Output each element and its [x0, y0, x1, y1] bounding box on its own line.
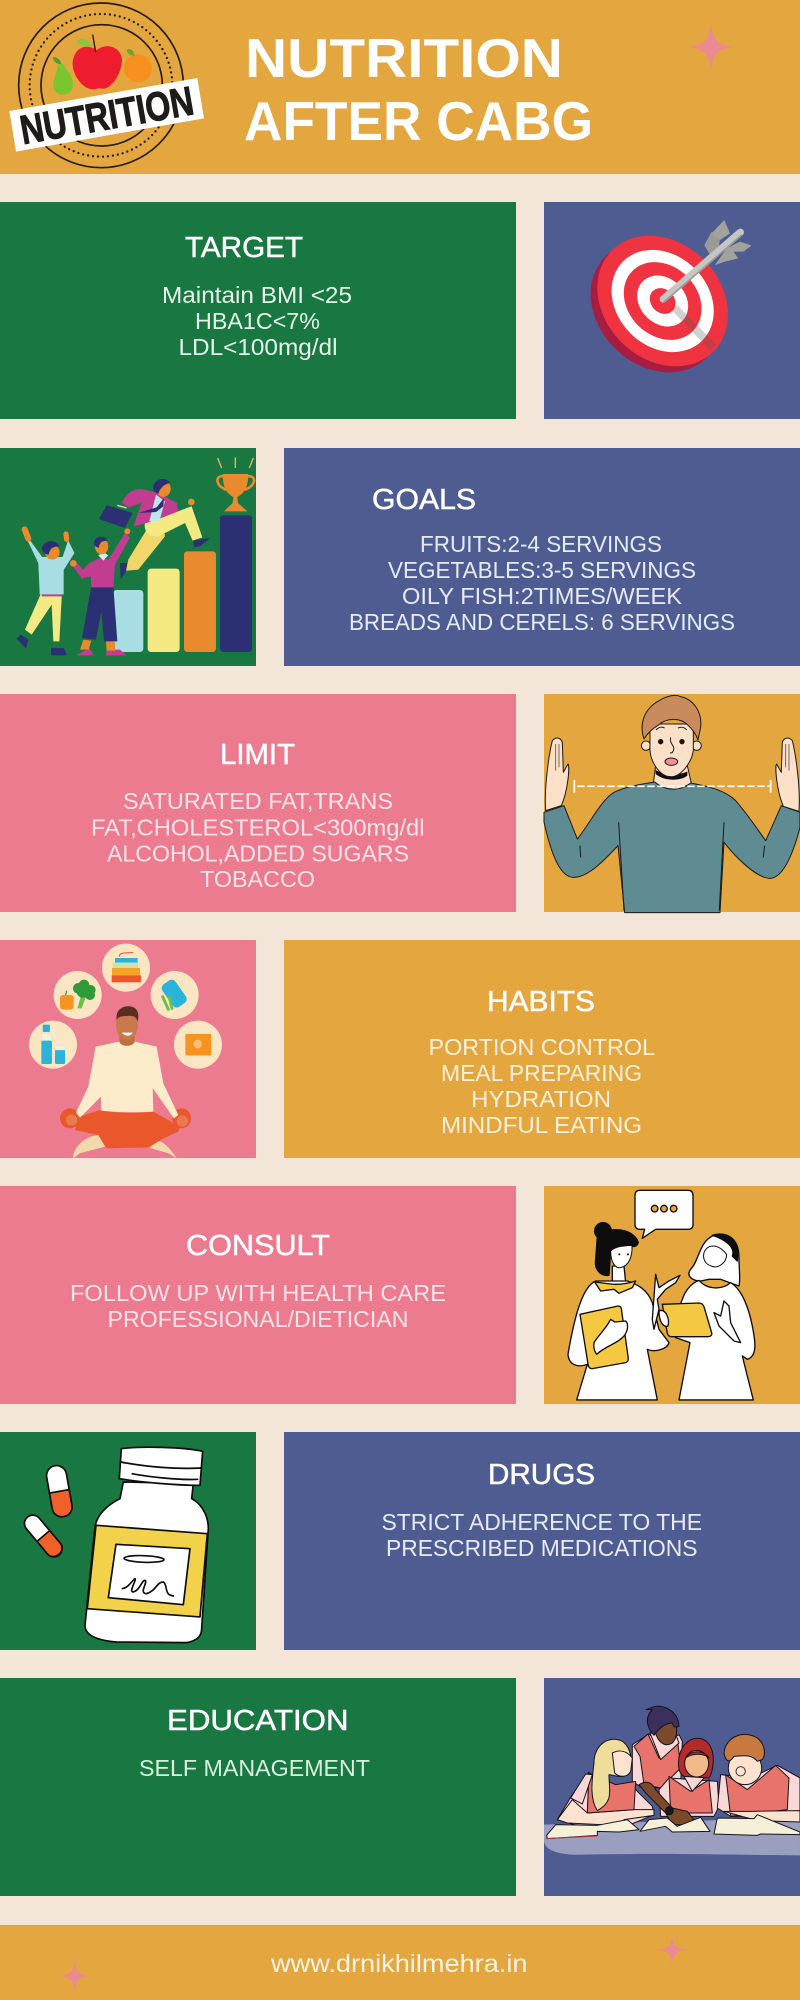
woman left: [595, 1223, 611, 1239]
blonde student: [557, 1739, 654, 1831]
capsule 1: [45, 1464, 74, 1518]
heading: limit: LIMIT: [220, 739, 295, 771]
icon: yoga mat and dumbbells: [160, 978, 189, 1009]
consult text: FOLLOW UP WITH HEALTH CARE: [70, 1280, 446, 1306]
panel: habits illustration: [0, 940, 256, 1158]
panel: goals: [284, 448, 800, 666]
habit items: PORTION CONTROL: [428, 1034, 655, 1060]
person jumping: [99, 479, 210, 580]
panel: target illustration: [544, 202, 800, 419]
books: [547, 1815, 800, 1839]
panel: limit: [0, 694, 516, 912]
icon: water bottle and glass: [41, 1025, 65, 1064]
heading: goals: GOALS: [372, 484, 476, 516]
limit items: ALCOHOL,ADDED SUGARS: [107, 840, 409, 866]
illustration: medicine bottle and capsules: [21, 1447, 208, 1643]
illustration: people climbing bars to a trophy: [17, 457, 254, 655]
target values: HBA1C<7%: [195, 308, 320, 334]
woman right: [689, 1234, 740, 1286]
pointing arm: [639, 1782, 699, 1826]
limit items: SATURATED FAT,TRANS: [123, 788, 393, 814]
illustration: students reading together: [544, 1706, 800, 1855]
serving goals: FRUITS:2-4 SERVINGS: [420, 531, 662, 557]
illustration: meditating man with habit icons: [29, 944, 222, 1158]
logo: nutrition badge: [9, 3, 204, 168]
serving goals: [349, 531, 735, 635]
target values: [162, 282, 352, 360]
serving goals: OILY FISH:2TIMES/WEEK: [402, 583, 683, 609]
illustration: two women talking: [568, 1190, 755, 1400]
table: [544, 1818, 800, 1855]
education text: SELF MANAGEMENT: [139, 1755, 370, 1781]
panel: consult illustration: [544, 1186, 800, 1404]
serving goals: VEGETABLES:3-5 SERVINGS: [388, 557, 696, 583]
panel: drugs: [284, 1432, 800, 1650]
target values: LDL<100mg/dl: [178, 334, 338, 360]
heading: target: TARGET: [185, 232, 303, 264]
panel: drugs illustration: [0, 1432, 256, 1650]
panel: target: [0, 202, 516, 419]
bottle: [85, 1447, 208, 1643]
sparkle left: [60, 1961, 90, 1991]
icon: pepper and broccoli: [60, 980, 96, 1010]
tall student: [632, 1706, 682, 1788]
heading: consult: CONSULT: [186, 1230, 330, 1262]
drugs text: [382, 1509, 702, 1561]
heading: drugs: DRUGS: [488, 1459, 595, 1491]
habit items: [428, 1034, 655, 1138]
website link: www.drnikhilmehra.in: [270, 1950, 528, 1978]
limit items: FAT,CHOLESTEROL<300mg/dl: [91, 814, 425, 840]
habit items: MEAL PREPARING: [441, 1060, 642, 1086]
panel: limit illustration: [544, 694, 800, 913]
drugs text: PRESCRIBED MEDICATIONS: [386, 1535, 698, 1561]
footer banner: [0, 1925, 800, 2000]
panel: education: [0, 1678, 516, 1896]
panel: education illustration: [544, 1678, 800, 1896]
heading: education: EDUCATION: [167, 1705, 348, 1737]
icon: stack of books: [112, 953, 141, 982]
capsule 2: [21, 1512, 66, 1560]
icon: archery target with arrow: [564, 209, 755, 399]
student with glasses: [717, 1734, 800, 1822]
person middle: [70, 528, 130, 655]
sparkle: [688, 23, 734, 71]
logo: nutrition badge: NUTRITION: [17, 77, 197, 153]
trophy: [217, 457, 254, 511]
person left: [17, 529, 73, 655]
header banner: [0, 0, 800, 174]
icon: cushion: [185, 1034, 211, 1055]
limit items: TOBACCO: [200, 866, 315, 892]
title: AFTER CABG: [244, 90, 593, 152]
habit items: HYDRATION: [471, 1086, 611, 1112]
drugs text: STRICT ADHERENCE TO THE: [382, 1509, 702, 1535]
serving goals: BREADS AND CERELS: 6 SERVINGS: [349, 609, 735, 635]
limit items: [91, 788, 425, 892]
panel: consult: [0, 1186, 516, 1404]
red-haired student: [659, 1738, 719, 1816]
seated man: [60, 1006, 191, 1158]
heading: habits: HABITS: [487, 986, 595, 1018]
speech bubble: [635, 1190, 693, 1238]
title: [244, 27, 593, 152]
consult text: [70, 1280, 446, 1332]
panel: goals illustration: [0, 448, 256, 666]
illustration: man measuring with raised hands: [544, 695, 800, 913]
title: NUTRITION: [245, 27, 563, 89]
target values: Maintain BMI <25: [162, 282, 352, 308]
consult text: PROFESSIONAL/DIETICIAN: [108, 1306, 408, 1332]
panel: habits: [284, 940, 800, 1158]
habit items: MINDFUL EATING: [441, 1112, 642, 1138]
sparkle right: [657, 1935, 687, 1965]
